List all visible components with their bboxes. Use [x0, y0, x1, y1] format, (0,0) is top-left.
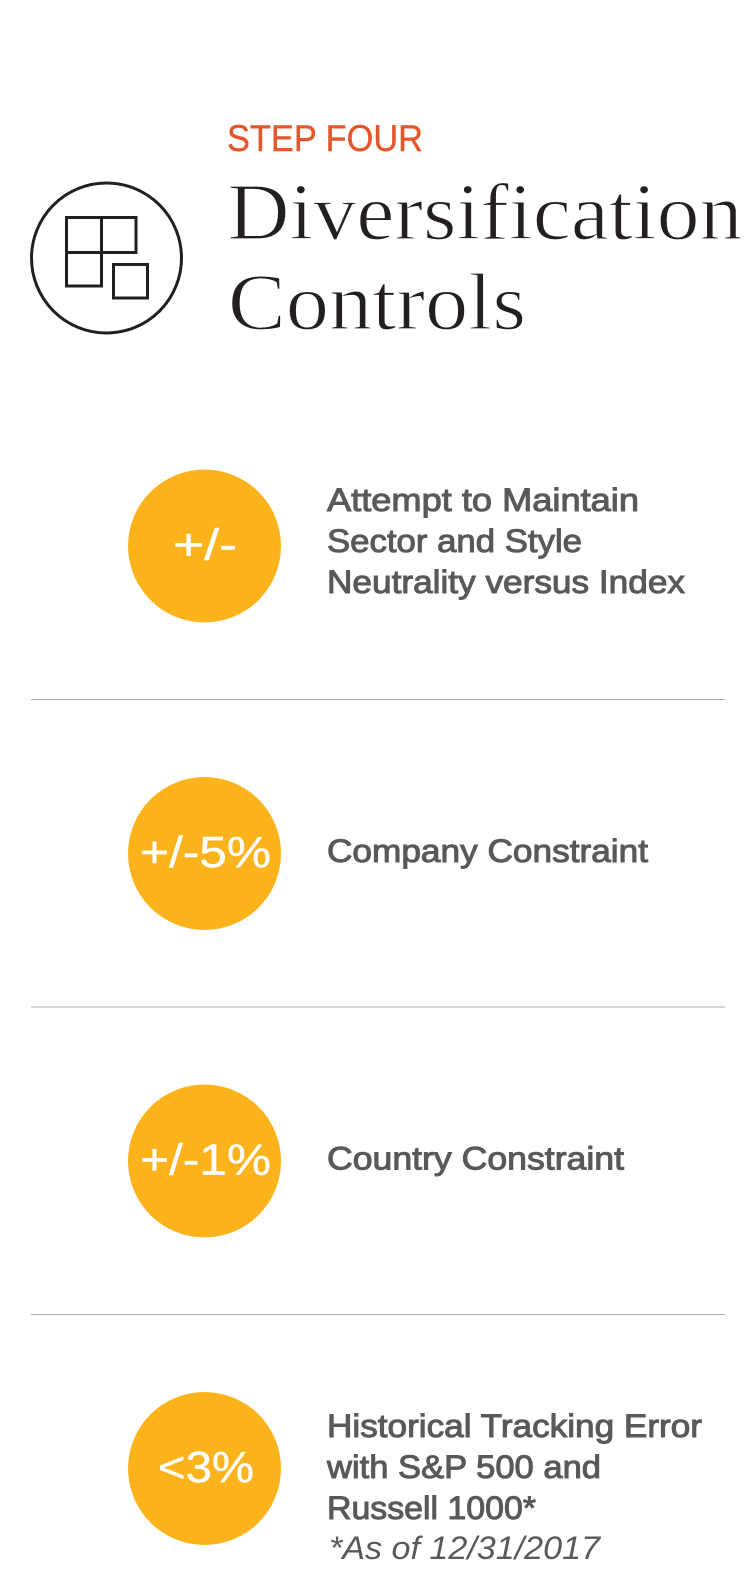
title — [228, 167, 742, 347]
text: country constraint: Country Constraint — [327, 1140, 624, 1176]
title: Diversification — [228, 167, 742, 257]
footnote: *As of 12/31/2017 — [329, 1530, 602, 1566]
text: neutrality: Sector and Style — [327, 523, 582, 559]
step label: STEP FOUR — [227, 117, 423, 159]
text: tracking error: Historical Tracking Error — [327, 1408, 702, 1444]
text: tracking error: with S&P 500 and — [326, 1449, 601, 1485]
badge: +/-1% — [128, 1084, 281, 1238]
text: neutrality: Neutrality versus Index — [327, 564, 685, 600]
badge: <3%: <3% — [158, 1443, 254, 1492]
badge: +/-5%: +/-5% — [140, 828, 271, 877]
text: company constraint: Company Constraint — [327, 833, 648, 869]
row: country constraint — [128, 1084, 624, 1238]
text: tracking error — [326, 1408, 702, 1526]
badge: <3% — [128, 1392, 281, 1545]
text: neutrality: Attempt to Maintain — [327, 482, 639, 518]
row: tracking error — [128, 1392, 702, 1566]
header — [32, 117, 742, 347]
badge: +/- — [128, 470, 281, 622]
text: tracking error: Russell 1000* — [327, 1490, 536, 1526]
icon: squares in circle — [32, 183, 182, 333]
badge: +/-5% — [128, 777, 281, 930]
title: Controls — [228, 257, 526, 347]
badge: +/-1%: +/-1% — [140, 1136, 271, 1184]
row: sector and style neutrality — [128, 470, 685, 622]
row: company constraint — [128, 777, 648, 930]
text: neutrality — [327, 482, 685, 600]
badge: +/-: +/- — [173, 520, 237, 570]
